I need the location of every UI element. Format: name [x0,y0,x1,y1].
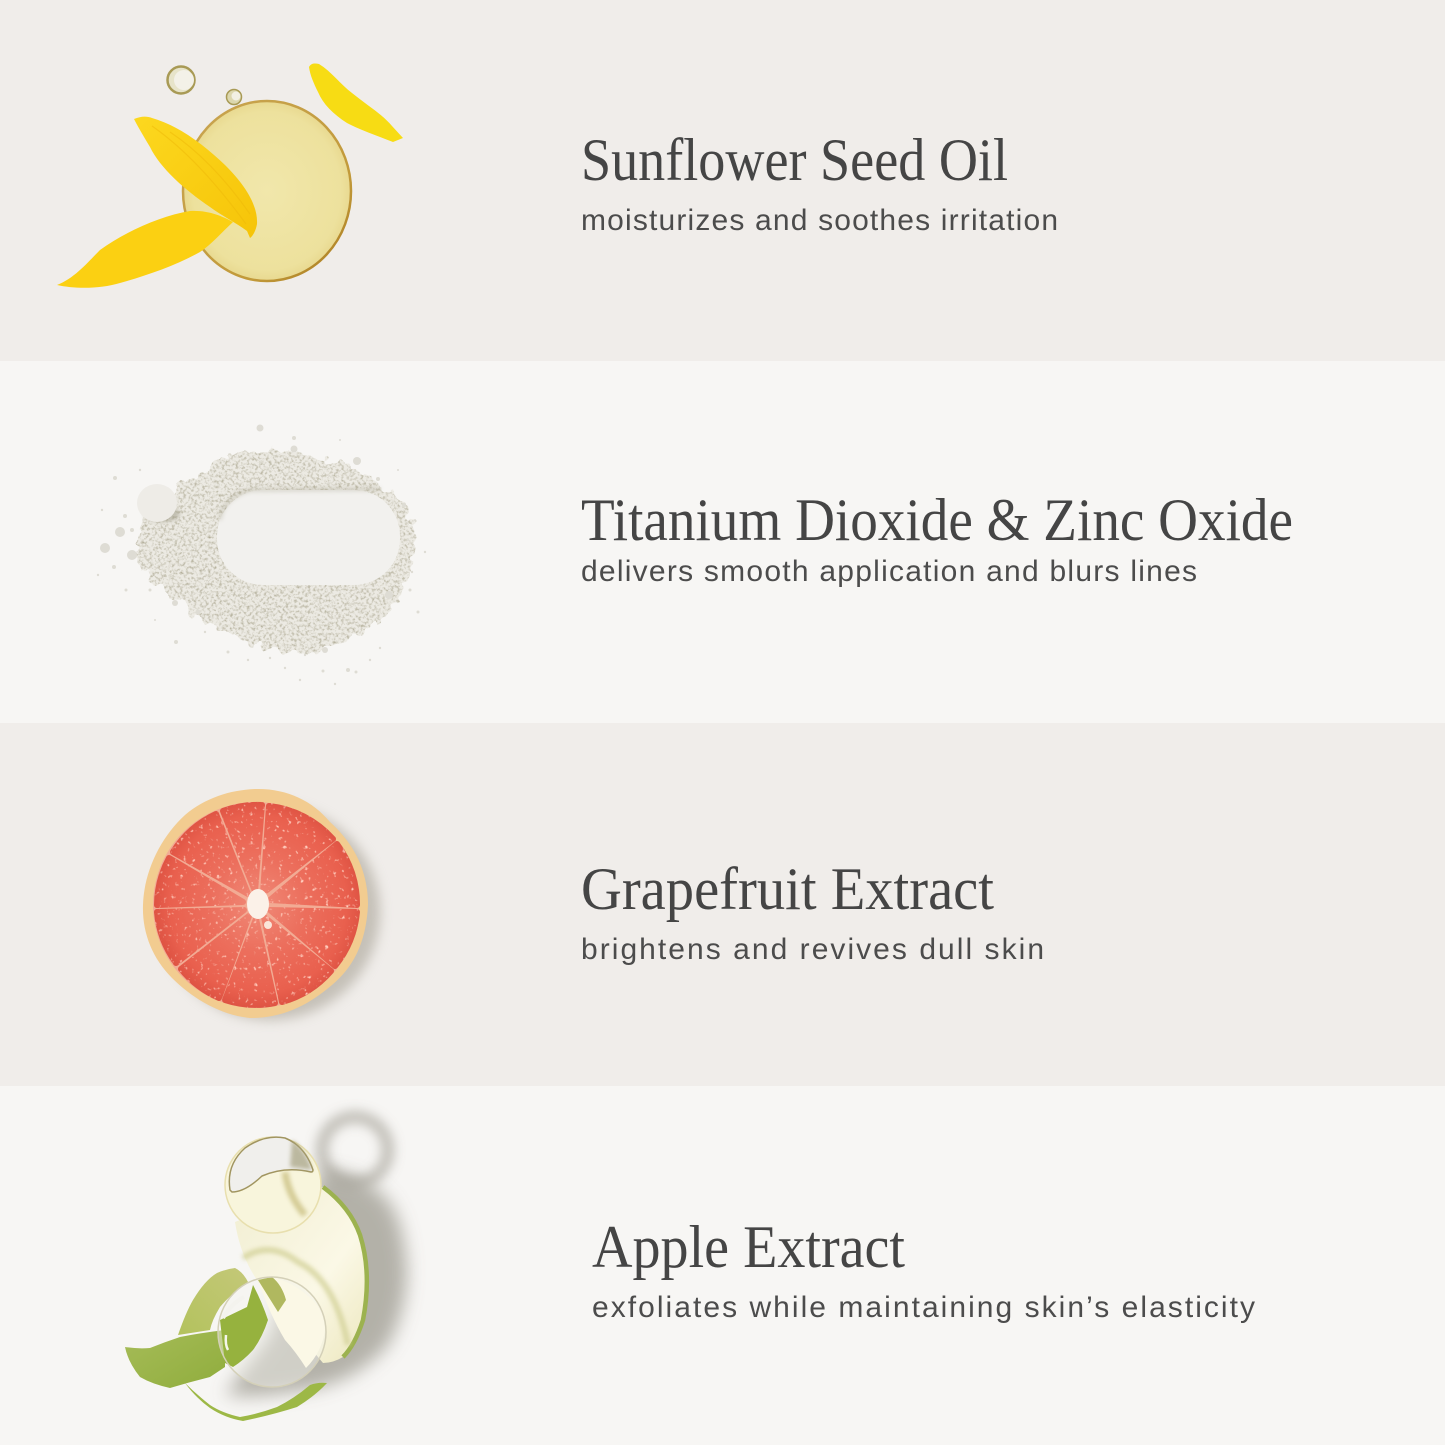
panel: sunflower seed oil [0,0,1445,361]
panel: titanium dioxide and zinc oxide [0,361,1445,723]
fruit segments [157,805,357,1005]
icon: oil droplet with sunflower petals [57,63,403,288]
clear top lens [225,1137,321,1233]
scattered powder particles [97,424,426,685]
heading: Sunflower Seed Oil: Sunflower Seed Oil [581,127,1008,193]
icon: apple slices and peel [125,1117,407,1421]
description: delivers smooth application and blurs lines: delivers smooth application and blurs lines [581,555,1197,588]
heading: Apple Extract: Apple Extract [592,1214,905,1280]
description: exfoliates while maintaining skin's elasticity: exfoliates while maintaining skin’s elasticity [592,1291,1255,1324]
apple peel [178,1268,248,1335]
icon: grapefruit slice [143,789,380,1020]
icon: mineral powder ring [97,424,426,685]
clear lower lens [218,1277,326,1387]
heading: Grapefruit Extract: Grapefruit Extract [581,856,994,922]
panel: apple extract [0,1086,1445,1445]
apple slice [235,1187,367,1363]
description: moisturizes and soothes irritation: moisturizes and soothes irritation [581,204,1058,237]
panel: grapefruit extract [0,723,1445,1086]
heading: Titanium Dioxide & Zinc Oxide: Titanium Dioxide & Zinc Oxide [581,487,1293,553]
description: brightens and revives dull skin: brightens and revives dull skin [581,933,1044,966]
